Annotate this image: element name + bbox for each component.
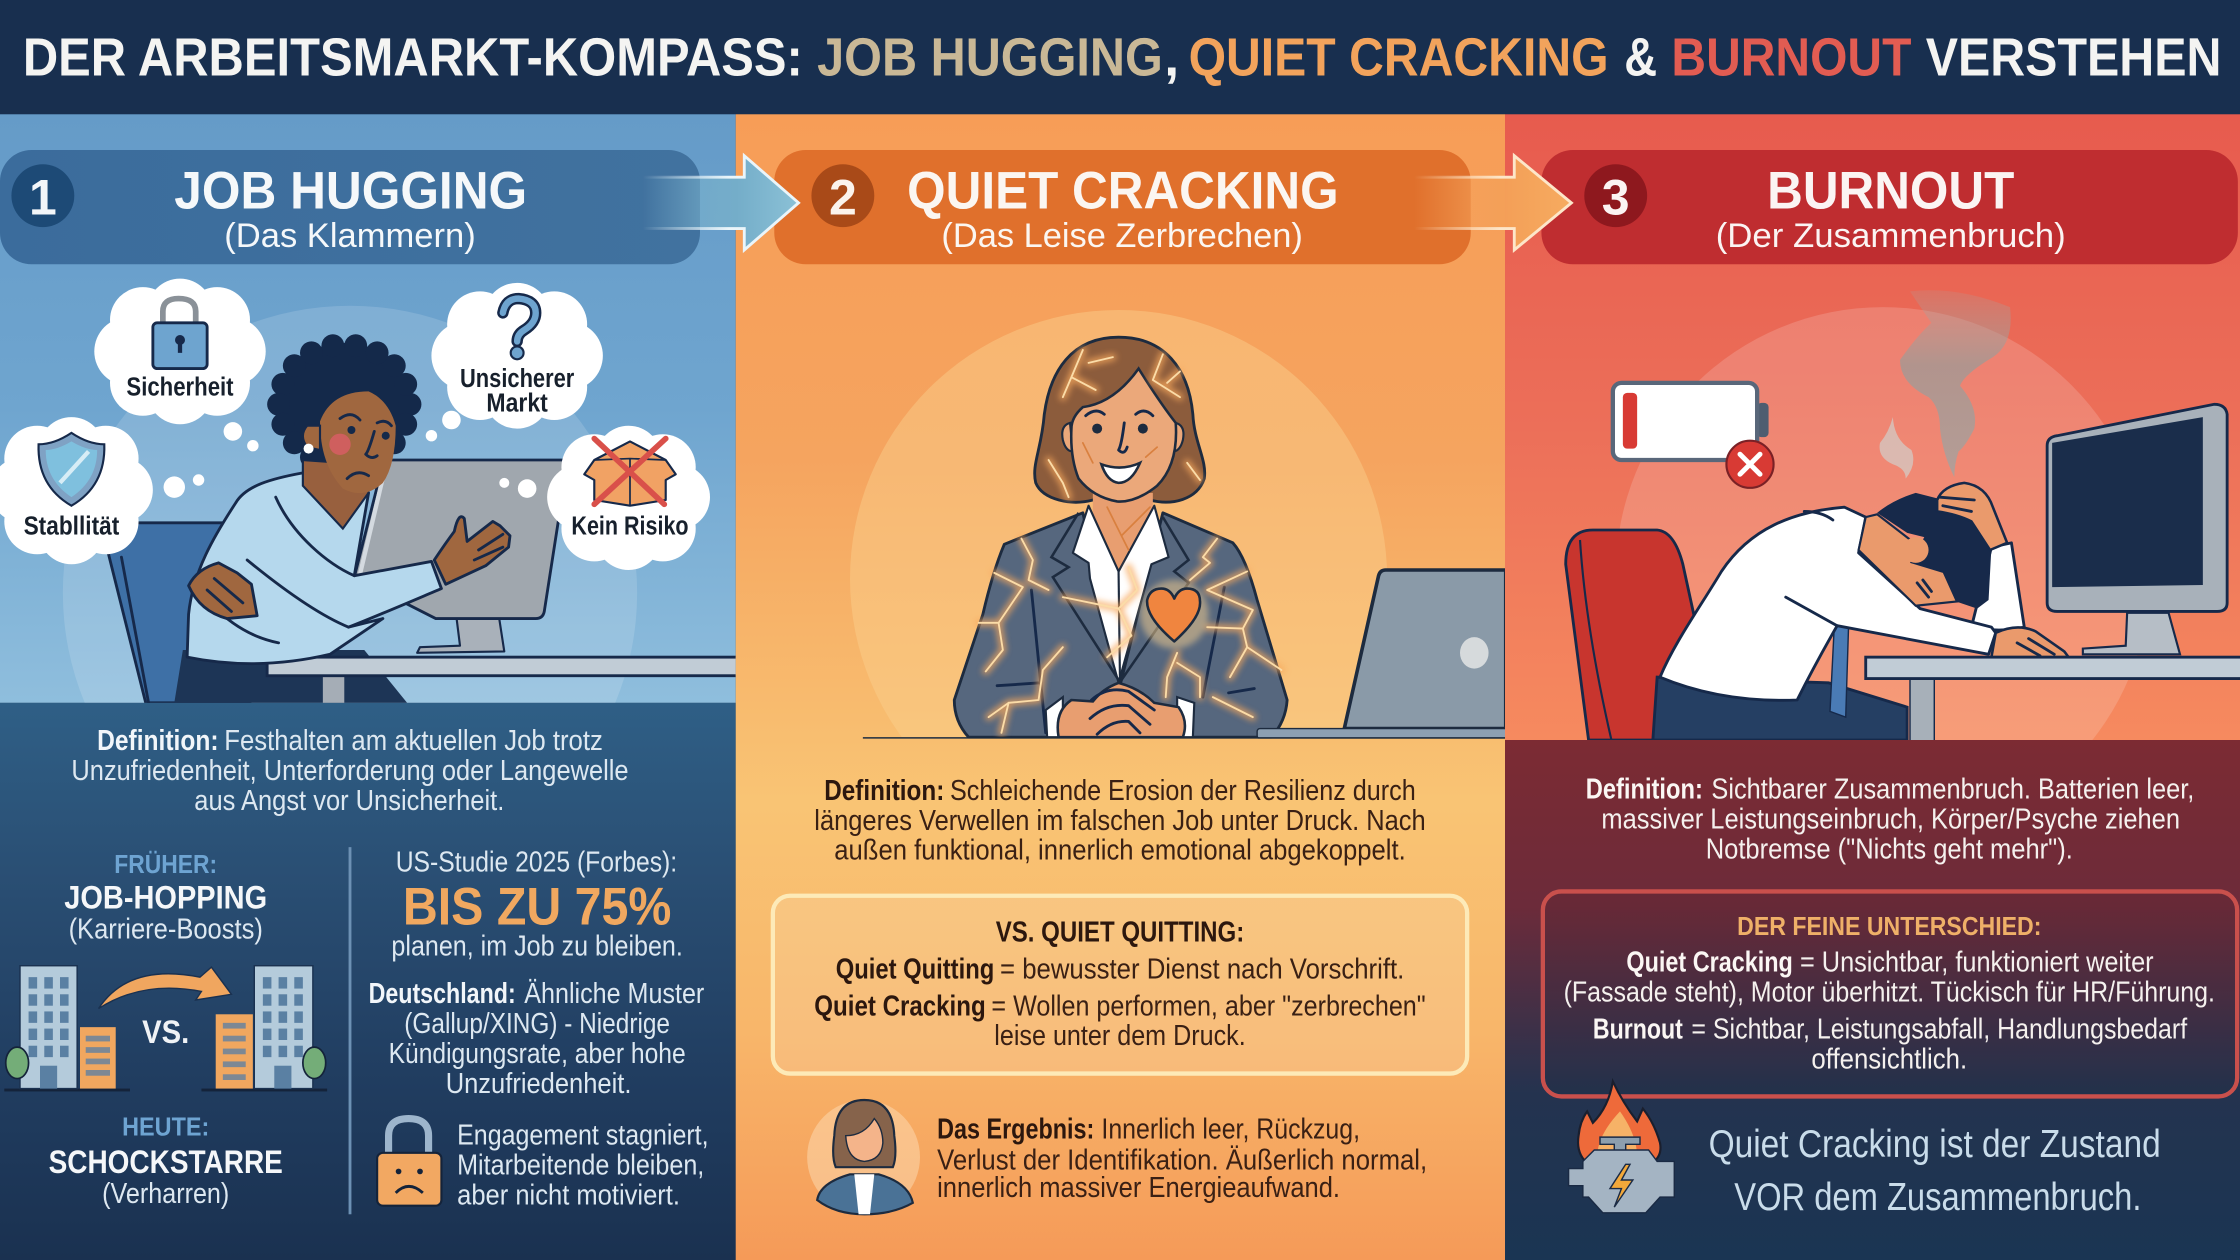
face (1859, 514, 1957, 606)
panel: burnout (1505, 114, 2240, 1260)
heading: burnout (1716, 162, 2066, 255)
left hand (189, 563, 257, 619)
right hand (434, 517, 510, 584)
text: engagement (457, 1119, 709, 1211)
ears (1062, 423, 1183, 451)
heart (1140, 580, 1209, 649)
text: engagement: Engagement stagniert, (457, 1119, 709, 1151)
thought bubbles (164, 411, 536, 498)
heading: job hugging: JOB HUGGING (174, 162, 527, 221)
text: das ergebnis: Innerlich leer, Rückzug, (1101, 1114, 1360, 1146)
heading: burnout: (Der Zusammenbruch) (1716, 217, 2066, 255)
definition text: Sichtbarer Zusammenbruch. Batterien leer, (1711, 774, 2194, 806)
cloud: Stabilität: Stabllität (24, 512, 120, 540)
heading: job hugging: (Das Klammern) (224, 217, 476, 255)
hair (267, 334, 421, 469)
stat block: us study: planen, im Job zu bleiben. (391, 931, 683, 963)
number badge 1: 1 (29, 169, 57, 225)
stat block: us study: BIS ZU 75% (403, 877, 671, 936)
heading: burnout: BURNOUT (1767, 162, 2014, 221)
pants (1653, 677, 1907, 740)
smoke (1880, 290, 2011, 479)
definition text: Definition: (1586, 774, 1703, 806)
desk (323, 674, 344, 703)
definition text: Notbremse ("Nichts geht mehr"). (1706, 834, 2073, 866)
callout: vs quiet quitting: leise unter dem Druck. (994, 1020, 1246, 1052)
jacket (954, 513, 1287, 737)
callout: vs quiet quitting (773, 896, 1467, 1074)
title: BURNOUT (1671, 29, 1912, 88)
tie (1830, 626, 1849, 717)
callout: vs quiet quitting: = bewusster Dienst nach Vorschrift. (1000, 954, 1404, 986)
header band (0, 0, 2240, 114)
cloud: Stabilität (0, 417, 153, 564)
cloud: Sicherheit: Sicherheit (126, 374, 234, 402)
header pill 3 (1541, 150, 2238, 264)
header pill 1 (0, 150, 700, 264)
cloud: Unsicherer Markt (431, 283, 603, 429)
arrow: quiet cracking to burnout (1414, 156, 1571, 250)
panel: job hugging (0, 114, 739, 1260)
monitor (2047, 404, 2227, 611)
lapels (1051, 513, 1189, 680)
cloud: Unsicherer Markt: Unsicherer (460, 365, 574, 393)
title: , (1164, 29, 1179, 88)
icon: sad lock (377, 1119, 441, 1206)
raised sleeve (1971, 543, 2024, 630)
cloud: Kein Risiko (547, 426, 710, 570)
callout: der feine unterschied: DER FEINE UNTERSCHIED: (1737, 913, 2041, 941)
block: früher: JOB-HOPPING (64, 879, 267, 916)
callout: der feine unterschied: Quiet Cracking (1626, 946, 1793, 978)
illustration: collapsed man at desk (1564, 290, 2240, 740)
title: DER ARBEITSMARKT-KOMPASS: (23, 29, 803, 88)
definition text (814, 775, 1426, 866)
callout: vs quiet quitting: VS. QUIET QUITTING: (996, 916, 1244, 948)
chair (109, 523, 250, 703)
title: JOB HUGGING (817, 29, 1163, 88)
shirt (1073, 506, 1169, 683)
callout: vs quiet quitting: Quiet Cracking (814, 991, 986, 1023)
title: & (1624, 29, 1657, 88)
cloud: Kein Risiko: Kein Risiko (571, 512, 689, 540)
raised hand (1937, 483, 2007, 550)
text: das ergebnis: Verlust der Identifikation. Äußerlich normal, (937, 1144, 1427, 1176)
text: engagement: aber nicht motiviert. (457, 1179, 680, 1211)
monitor stand (416, 620, 506, 654)
definition text: längeres Verwellen im falschen Job unter Druck. Nach (814, 805, 1426, 837)
icon: buildings with arrow (4, 966, 327, 1091)
panel: quiet cracking (736, 114, 1507, 1260)
heading: job hugging (174, 162, 527, 255)
block: früher: FRÜHER: (114, 850, 217, 879)
ear (1908, 538, 1929, 563)
closing statement (1709, 1123, 2161, 1219)
heading: quiet cracking (907, 162, 1339, 255)
number badge 2 (811, 164, 874, 227)
block: früher: (Karriere-Boosts) (69, 914, 263, 946)
block: heute: HEUTE: (122, 1114, 209, 1142)
icon: faceless avatar (807, 1100, 920, 1214)
number badge 3: 3 (1602, 169, 1630, 225)
shirt (1660, 507, 1996, 700)
cracks (979, 350, 1281, 733)
text: germany: Deutschland: (369, 978, 516, 1010)
hair back (1035, 337, 1205, 502)
arrow: job hugging to quiet cracking (643, 156, 799, 250)
text: das ergebnis (937, 1114, 1427, 1204)
heading: quiet cracking: (Das Leise Zerbrechen) (941, 217, 1303, 255)
text: germany: Unzufriedenheit. (446, 1068, 631, 1100)
definition text: außen funktional, innerlich emotional abgekoppelt. (834, 834, 1406, 866)
definition text (71, 725, 629, 817)
definition text: Festhalten am aktuellen Job trotz (224, 725, 603, 757)
icon: lock (153, 299, 207, 369)
face (320, 391, 396, 493)
definition text (1586, 774, 2194, 866)
title (23, 29, 2221, 88)
monitor back (354, 460, 567, 619)
definition text: aus Angst vor Unsicherheit. (194, 785, 504, 817)
callout: vs quiet quitting: = Wollen performen, aber "zerbrechen" (991, 991, 1426, 1023)
text: germany: Ähnliche Muster (524, 978, 705, 1010)
laptop (1344, 570, 1506, 729)
number badge 3 (1584, 164, 1647, 227)
heading: quiet cracking: QUIET CRACKING (907, 162, 1339, 221)
icon: shield (39, 433, 104, 506)
left building (6, 966, 116, 1089)
title: QUIET CRACKING (1189, 29, 1609, 88)
clasped hands (1046, 697, 1194, 737)
arrow (99, 967, 231, 1009)
definition text: Unzufriedenheit, Unterforderung oder Langewelle (71, 755, 629, 787)
desk (1910, 679, 1934, 743)
icon: crossed-out box (584, 439, 676, 506)
cloud: Unsicherer Markt: Markt (486, 389, 548, 417)
callout: der feine unterschied: Burnout (1593, 1014, 1683, 1046)
closing statement: Quiet Cracking ist der Zustand (1709, 1123, 2161, 1166)
closing statement: VOR dem Zusammenbruch. (1734, 1176, 2141, 1219)
pants (174, 650, 407, 703)
icon: question mark (503, 299, 536, 359)
header pill 2 (774, 150, 1471, 264)
neck (1093, 493, 1153, 571)
definition text: Definition: (824, 775, 944, 807)
icon: overheating engine (1569, 1081, 1674, 1213)
text: germany: (Gallup/XING) - Niedrige (404, 1008, 670, 1040)
lower hand (1991, 627, 2069, 657)
text: germany: Kündigungsrate, aber hohe (389, 1038, 686, 1070)
block: heute (49, 1114, 283, 1210)
text: das ergebnis: Das Ergebnis: (937, 1114, 1094, 1146)
block: heute: SCHOCKSTARRE (49, 1143, 283, 1180)
definition text: Schleichende Erosion der Resilienz durch (950, 775, 1416, 807)
block: früher (64, 850, 267, 946)
hair (1877, 493, 1991, 609)
number badge 1 (11, 164, 74, 227)
icon: empty battery (1613, 383, 1774, 488)
stat block: us study (391, 846, 683, 963)
shirt with hugging arm (187, 473, 441, 664)
stat block: us study: US-Studie 2025 (Forbes): (396, 846, 677, 878)
callout: der feine unterschied: offensichtlich. (1811, 1044, 1967, 1076)
right building (216, 966, 326, 1089)
neck (303, 460, 369, 529)
illustration: person hugging monitor (63, 306, 736, 703)
callout: der feine unterschied: = Unsichtbar, funktioniert weiter (1800, 946, 2154, 978)
illustration: smiling woman with cracks (850, 310, 1505, 739)
definition text: massiver Leistungseinbruch, Körper/Psyche ziehen (1601, 804, 2180, 836)
definition text: Definition: (97, 725, 219, 757)
chair (1566, 530, 1700, 740)
callout: der feine unterschied (1543, 891, 2237, 1096)
callout: vs quiet quitting: Quiet Quitting (836, 954, 994, 986)
number badge 2: 2 (829, 169, 857, 225)
vs label: VS. (142, 1013, 189, 1050)
cloud: Sicherheit (94, 279, 266, 424)
block: heute: (Verharren) (102, 1178, 229, 1210)
text: engagement: Mitarbeitende bleiben, (457, 1149, 704, 1181)
face (1071, 369, 1176, 502)
text: germany (369, 978, 705, 1100)
text: das ergebnis: innerlich massiver Energieaufwand. (937, 1172, 1340, 1204)
